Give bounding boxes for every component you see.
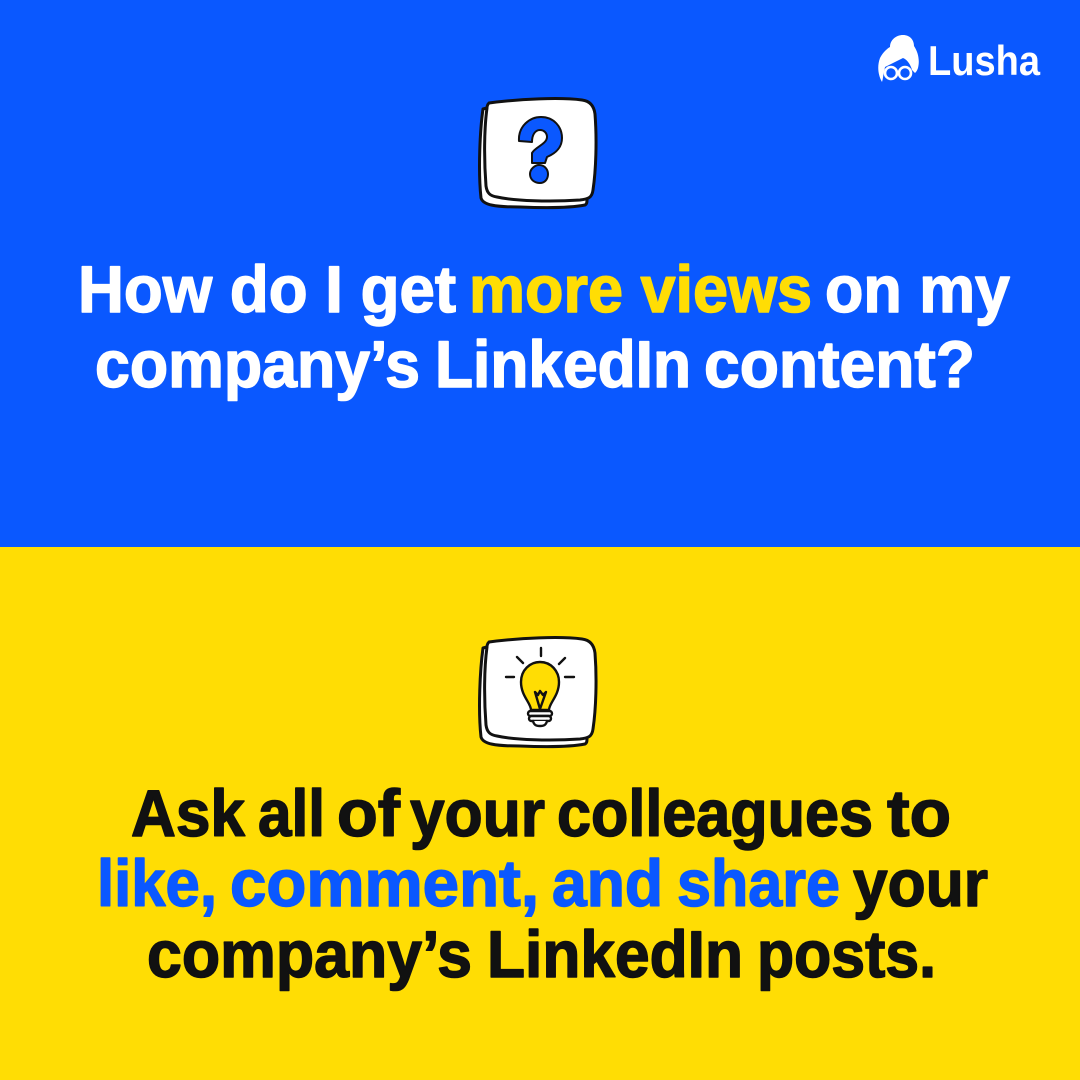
logo: Lusha: [878, 35, 1041, 84]
heading: answer: company’s: [147, 917, 472, 991]
heading: answer: [97, 776, 988, 991]
logo wordmark: Lusha: [928, 37, 1041, 84]
heading: question: LinkedIn: [435, 327, 691, 401]
icon: Lusha hair and glasses: [878, 35, 919, 82]
heading: question: [78, 252, 1010, 401]
heading: answer: to: [887, 776, 951, 850]
heading: question: on my: [825, 252, 1010, 326]
heading: answer: your: [853, 846, 988, 920]
panel: answer background: [0, 547, 1080, 1080]
heading: question: more views: [469, 252, 812, 326]
panel: question background: [0, 0, 1080, 547]
heading: question: content?: [704, 327, 975, 401]
heading: answer: comment,: [230, 846, 539, 920]
heading: answer: like,: [97, 846, 217, 920]
heading: answer: your: [410, 776, 545, 850]
heading: answer: and: [552, 846, 663, 920]
icon: light bulb glyph: [506, 648, 574, 726]
icon: question mark card: [480, 99, 596, 208]
icon: question mark glyph: [519, 117, 562, 183]
heading: answer: all: [258, 776, 325, 850]
heading: answer: posts.: [757, 917, 936, 991]
heading: answer: of: [337, 776, 401, 850]
icon: light bulb card: [480, 638, 596, 747]
heading: answer: colleagues: [557, 776, 873, 850]
heading: answer: Ask: [131, 776, 245, 850]
heading: question: company’s: [95, 327, 420, 401]
heading: answer: share: [677, 846, 840, 920]
heading: question: How do I get: [78, 252, 456, 326]
heading: answer: LinkedIn: [487, 917, 743, 991]
